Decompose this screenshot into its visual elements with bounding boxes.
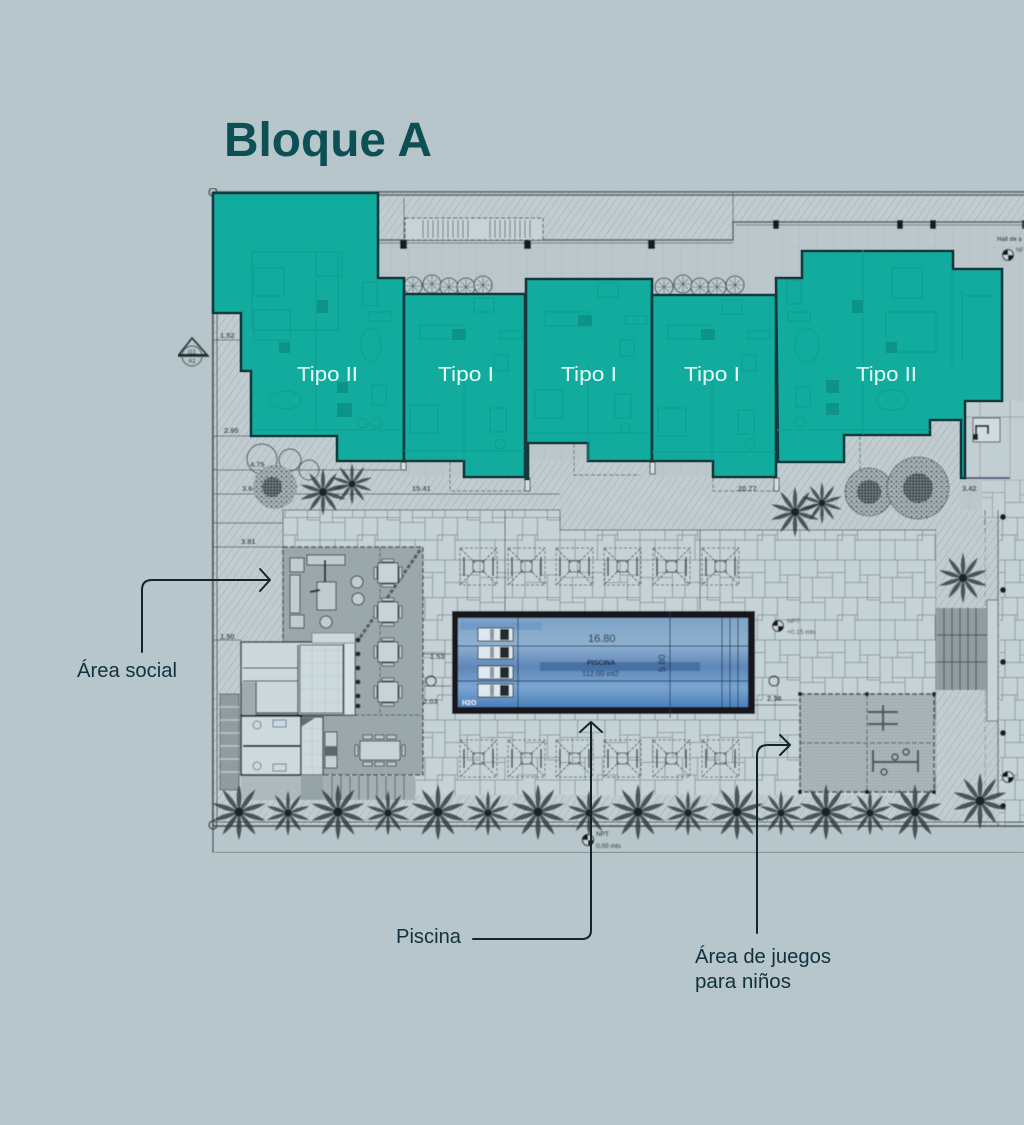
dimension lines [213,340,798,705]
section marker: A1 [188,359,196,365]
dimension labels: 20.77 [738,484,757,493]
pool: 112.00 mt2 [582,669,619,678]
stepping stripes [937,608,987,690]
title: Bloque A [224,114,432,167]
unit label: Tipo I third: Tipo I [684,364,740,386]
dimension labels: 3.42 [962,484,977,493]
top strip border lines [213,192,1024,243]
right walkway lines [985,510,998,826]
level markers: 0.00 mts [596,843,622,850]
hatched side patches [936,530,985,608]
pool labels: 16.80 [588,633,616,645]
playground [798,692,936,794]
section marker [178,338,208,366]
site plan [178,188,1024,853]
trees right [845,457,949,519]
shrubs between units [404,275,744,296]
trees left [247,444,319,509]
dimension labels: 1.52 [220,331,235,340]
corridor [378,222,1024,510]
label: área de juegos para niños: Área de juegos [695,945,831,968]
bottom stripes [241,776,415,800]
level markers: +0.15 mts [787,629,816,636]
dining tables [374,559,402,587]
level markers [426,237,1024,850]
label: piscina: Piscina [396,926,462,948]
dimension labels: 2.95 [224,426,239,435]
palms [212,463,1007,840]
pool: H2O [462,700,477,707]
hatched garden under the units [217,313,961,530]
pool [452,611,755,718]
right service area [965,401,1024,479]
sunbeds [460,548,739,777]
unit: Tipo II right [776,250,1002,478]
dimension labels: 2.03 [423,697,438,706]
dimension labels: 3.61 [242,484,257,493]
long table [360,741,400,760]
arrow: área social [142,569,270,652]
lounge furniture [290,555,364,628]
plan base [213,192,1024,826]
unit label: Tipo I first: Tipo I [438,364,494,386]
level markers: Hall de a [997,237,1022,243]
dimension labels: 3.81 [241,537,256,546]
level markers: NF [1016,248,1024,254]
social area [283,547,423,775]
top columns [400,220,1024,249]
arrow: piscina [473,722,602,939]
arrow: área de juegos [757,735,790,933]
label: área de juegos para niños: para niños [695,971,791,993]
paver courtyard [283,510,936,795]
dimension labels: 2.38 [767,694,782,703]
unit: Tipo II left [213,193,404,461]
column dots [356,638,360,708]
pool: PISCINA [587,660,615,667]
unit label: Tipo II right: Tipo II [856,364,917,386]
dimension labels: 1.50 [220,632,235,641]
section marker: G1 [188,350,197,356]
unit label: Tipo I second: Tipo I [561,364,617,386]
dimension labels [220,331,977,706]
sun loungers [478,628,513,641]
garden dashed outlines [450,436,860,491]
right column dots [1000,514,1006,809]
panel: apartment units [213,193,1002,479]
pool: 5.80 [657,654,667,672]
dimension labels: 15.41 [412,484,431,493]
top stair [405,218,543,240]
hatched bottom planting strip [217,795,1000,823]
bbq counter [325,732,337,768]
outer frame lines [209,188,1024,853]
small wall columns [401,462,779,491]
level markers: NPT [787,618,800,625]
level markers: NPT [596,831,609,838]
left stairs [220,694,239,790]
dimension labels: 1.53 [430,652,445,661]
label: área social: Área social [77,659,177,682]
unit: Tipo I first [404,294,525,477]
label: área de juegos para niños [695,945,831,993]
unit label: Tipo II left: Tipo II [297,364,358,386]
dimension labels: 4.75 [250,460,265,469]
unit: Tipo I second [526,279,652,479]
service rooms [241,633,355,800]
unit: Tipo I third [652,295,776,477]
